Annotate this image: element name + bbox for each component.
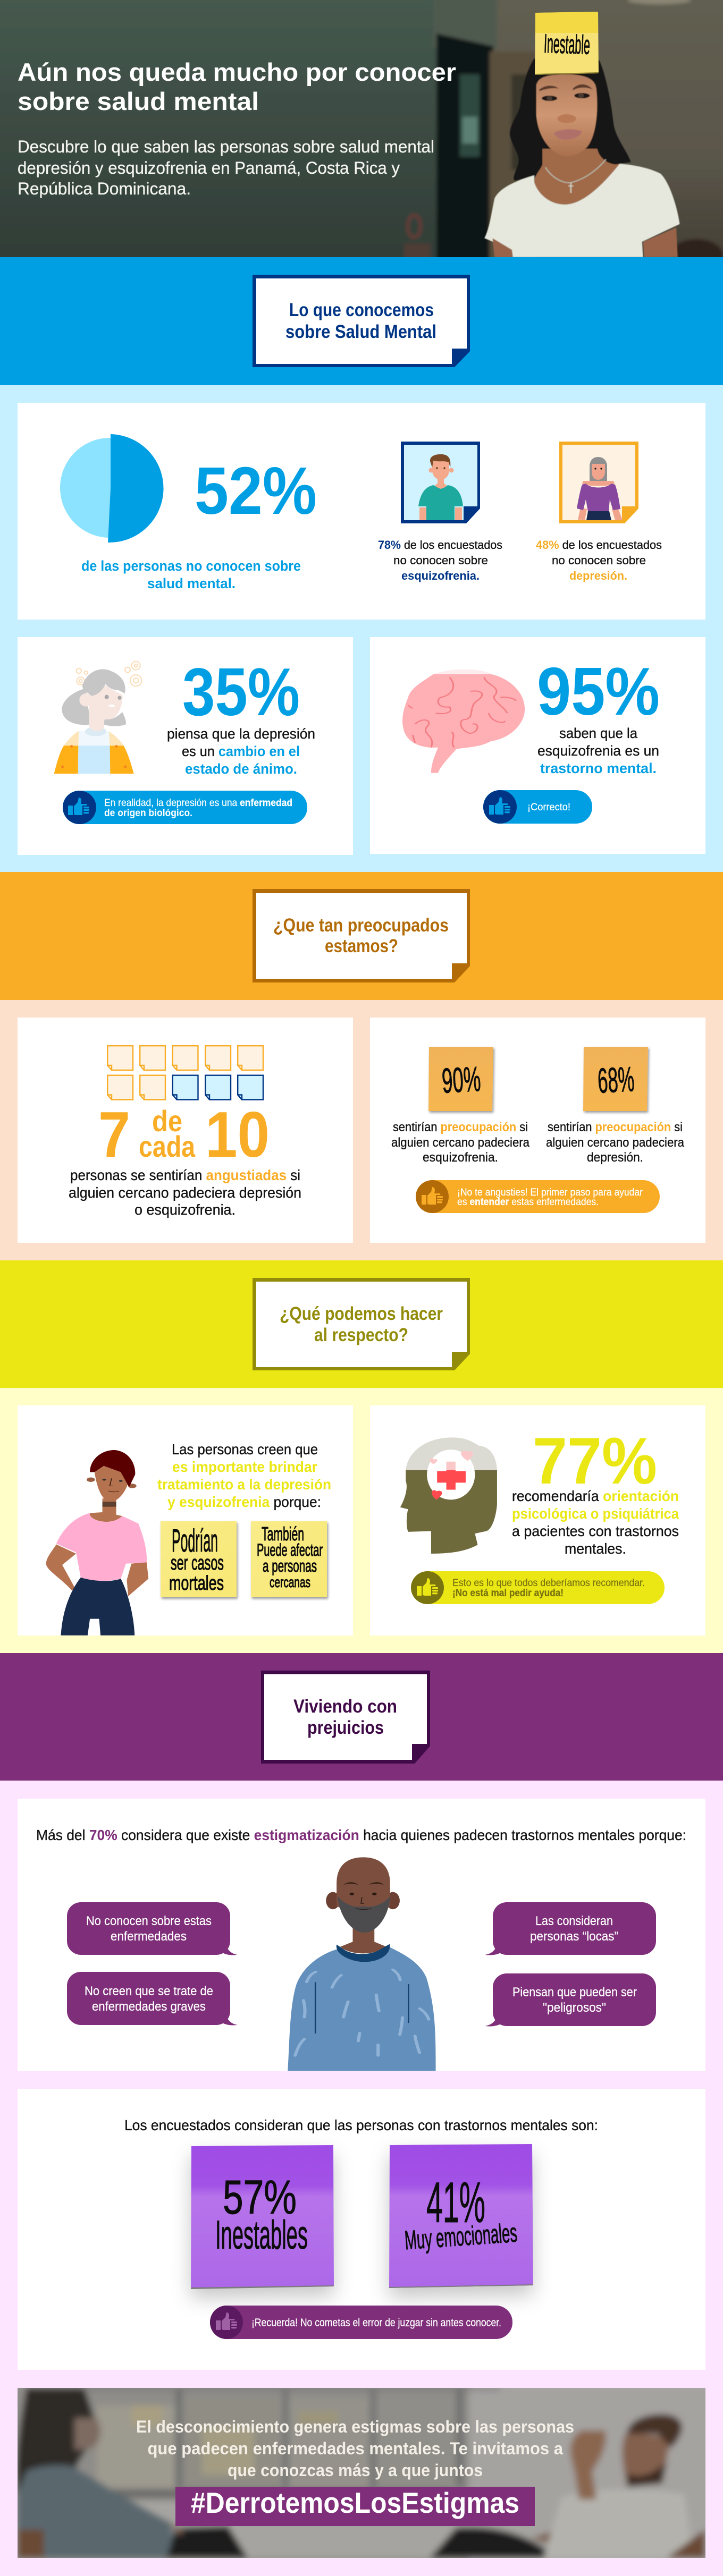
- statement: psicológica o psiquiátrica: [512, 1505, 679, 1522]
- sticky note: podrian ser casos mortales: ser casos: [171, 1552, 224, 1574]
- caption 48%: [536, 538, 662, 582]
- statement: es importante brindar: [172, 1459, 317, 1475]
- sticky note: inestable: Inestable: [543, 29, 591, 60]
- sticky note: podrian ser casos mortales: mortales: [169, 1572, 224, 1595]
- statement: esquizofrenia es un: [537, 743, 659, 759]
- note grid icons: [107, 1046, 263, 1100]
- caption 78%: 78% de los encuestados: [378, 538, 502, 552]
- section 3 title card: [253, 1278, 470, 1370]
- illustration: bearded man: [288, 1857, 436, 2071]
- statement: Más del 70% considera que existe estigmatización hacia quienes padecen trastornos mentales porque:: [36, 1827, 686, 1843]
- pill note: ¡No está mal pedir ayuda!: [452, 1587, 564, 1599]
- sticky note: 41% muy emocionales: [389, 2144, 533, 2288]
- statement: recomendaría orientación: [512, 1488, 679, 1504]
- stat 7 de cada 10: cada: [139, 1130, 196, 1163]
- bubble: no creen: No creen que se trate de: [85, 1984, 213, 1998]
- subheading: depresión y esquizofrenia en Panamá, Costa Rica y: [18, 158, 400, 177]
- caption 68%: sentirían preocupación si: [548, 1120, 683, 1134]
- section 3 header band: [0, 1260, 723, 1388]
- subheading: República Dominicana.: [18, 179, 191, 198]
- statement: [69, 1167, 301, 1218]
- caption 90%: alguien cercano padeciera: [391, 1136, 529, 1150]
- heading: Aún nos queda mucho por conocer: [18, 58, 456, 86]
- section 2 header band: [0, 872, 723, 1000]
- pill note: [483, 790, 592, 824]
- bubble: peligrosos: "peligrosos": [543, 2001, 606, 2015]
- closing message: El desconocimiento genera estigmas sobre las personas: [136, 2417, 574, 2436]
- panel: encuestados: [18, 2089, 705, 2370]
- statement: estado de ánimo.: [185, 761, 297, 777]
- panel: tratamiento: [18, 1405, 353, 1636]
- bubble: peligrosos: [485, 1973, 656, 2027]
- panel: 77 percent: [370, 1405, 705, 1636]
- section 2 title card: [253, 889, 470, 982]
- pie chart: [60, 434, 164, 543]
- caption 48%: 48% de los encuestados: [536, 538, 662, 552]
- bubble: no conocen: No conocen sobre estas: [86, 1914, 212, 1928]
- pill note: ¡Recuerda! No cometas el error de juzgar sin antes conocer.: [251, 2317, 501, 2329]
- caption: [81, 558, 301, 591]
- heading: [18, 58, 456, 115]
- hashtag box: #DerrotemosLosEstigmas: [191, 2486, 519, 2519]
- caption 68%: [546, 1120, 684, 1165]
- bubble: locas: [485, 1902, 656, 1955]
- sticky note: 41% muy emocionales: 41%: [426, 2170, 485, 2234]
- statement: tratamiento a la depresión: [157, 1476, 331, 1493]
- sticky note: podrian ser casos mortales: [161, 1521, 237, 1597]
- panel: 7 de cada 10: [18, 1018, 353, 1243]
- caption 68%: depresión.: [587, 1150, 643, 1165]
- caption 90%: [391, 1120, 529, 1165]
- statement: [157, 1441, 331, 1510]
- sticky note: tambien puede afectar: a personas: [263, 1556, 317, 1575]
- section 2 body: [0, 1000, 723, 1260]
- illustration: worried woman: [54, 662, 141, 774]
- sticky note: tambien puede afectar: cercanas: [270, 1574, 310, 1590]
- statement: personas se sentirían angustiadas si: [70, 1167, 300, 1183]
- sticky note: podrian ser casos mortales: Podrían: [172, 1523, 218, 1558]
- blurred photo: therapy session: [4, 2383, 719, 2563]
- panel: estigmatizacion: [18, 1799, 705, 2071]
- caption 78%: esquizofrenia.: [401, 569, 480, 582]
- statement: piensa que la depresión: [167, 726, 315, 742]
- illustration: brain: [402, 670, 525, 773]
- stat 7 de cada 10: 7: [98, 1098, 130, 1171]
- statement: y esquizofrenia porque:: [167, 1494, 321, 1510]
- statement: es un cambio en el: [182, 743, 300, 759]
- sticky note 68%: [583, 1047, 648, 1111]
- stat 7 de cada 10: de: [152, 1104, 182, 1138]
- section 1 title card: [253, 275, 470, 367]
- stat 35%: 35%: [182, 654, 300, 730]
- pill note: [411, 1571, 665, 1604]
- panel: 52 percent: [18, 403, 705, 620]
- bubble: no conocen: [67, 1902, 238, 1955]
- bubble: no creen: [67, 1972, 238, 2026]
- statement: [512, 1488, 679, 1557]
- illustration: woman in pink: [46, 1450, 148, 1636]
- statement: mentales.: [565, 1540, 626, 1557]
- section 1 title card: Lo que conocemos: [289, 300, 434, 320]
- sticky note 68%: 68%: [596, 1059, 635, 1100]
- bubble: locas: personas “locas”: [530, 1929, 618, 1944]
- closing message: [136, 2417, 574, 2480]
- caption 90%: esquizofrenia.: [423, 1150, 498, 1165]
- stat 77%: 77%: [533, 1425, 657, 1498]
- section 4 body: [0, 1781, 723, 2576]
- section 1 body: [0, 385, 723, 872]
- section 4 header band: [0, 1653, 723, 1781]
- hero: photo banner: [0, 0, 723, 271]
- statement: trastorno mental.: [540, 760, 657, 776]
- pill note: ¡No te angusties! El primer paso para ayudar: [457, 1187, 643, 1198]
- stat 7 de cada 10: 10: [205, 1098, 270, 1171]
- statement: Las personas creen que: [172, 1441, 318, 1458]
- section 3 title card: al respecto?: [314, 1325, 408, 1345]
- section 4 title card: [261, 1671, 430, 1764]
- statement: Los encuestados consideran que las personas con trastornos mentales son:: [124, 2117, 598, 2133]
- pill note: [416, 1180, 660, 1213]
- pill note: Esto es lo que todos deberíamos recomendar.: [452, 1577, 645, 1589]
- pill note: En realidad, la depresión es una enfermedad: [104, 797, 292, 809]
- closing message: que padecen enfermedades mentales. Te invitamos a: [148, 2439, 563, 2458]
- subheading: [18, 137, 434, 198]
- stat 95%: 95%: [537, 654, 660, 729]
- stat 52%: 52%: [195, 453, 317, 528]
- caption: de las personas no conocen sobre: [81, 558, 301, 574]
- statement: alguien cercano padeciera depresión: [69, 1184, 301, 1201]
- note: man: [401, 442, 480, 523]
- heading: sobre salud mental: [18, 87, 259, 115]
- section 4 title card: prejuicios: [307, 1717, 384, 1738]
- pill note: [63, 791, 307, 824]
- subheading: Descubre lo que saben las personas sobre salud mental: [18, 137, 434, 156]
- stat 7 de cada 10: [98, 1098, 270, 1171]
- note: woman: [559, 442, 638, 523]
- section 3 body: [0, 1388, 723, 1653]
- section 3 title card: ¿Qué podemos hacer: [280, 1303, 443, 1324]
- sticky note: tambien puede afectar: Puede afectar: [257, 1540, 323, 1560]
- pill note: de origen biológico.: [104, 807, 192, 819]
- sticky note: 57% inestables: Inestables: [215, 2213, 308, 2258]
- sticky note: 41% muy emocionales: Muy emocionales: [403, 2218, 518, 2255]
- hero photo: [0, 0, 723, 271]
- section 1 header band: [0, 257, 723, 385]
- caption 68%: alguien cercano padeciera: [546, 1136, 684, 1150]
- statement: [167, 726, 315, 777]
- sticky note: tambien puede afectar: [251, 1521, 327, 1597]
- panel: 95 percent: [370, 637, 705, 854]
- section 4 title card: Viviendo con: [293, 1696, 397, 1717]
- caption 48%: depresión.: [569, 569, 627, 582]
- section 2 title card: estamos?: [325, 936, 398, 956]
- pill note: [210, 2306, 512, 2339]
- caption 90%: sentirían preocupación si: [393, 1120, 528, 1134]
- statement: a pacientes con trastornos: [512, 1523, 679, 1539]
- sticky note: inestable: [535, 12, 599, 75]
- caption 48%: no conocen sobre: [552, 554, 646, 567]
- panel: 35 percent: [18, 637, 353, 855]
- closing banner: [4, 2383, 719, 2563]
- pill note: ¡Correcto!: [527, 801, 570, 813]
- caption 78%: no conocen sobre: [393, 554, 488, 567]
- statement: [537, 725, 659, 776]
- statement: o esquizofrenia.: [134, 1201, 236, 1218]
- sticky note: tambien puede afectar: También: [262, 1523, 304, 1545]
- section 1 title card: sobre Salud Mental: [285, 321, 436, 342]
- bubble: locas: Las consideran: [535, 1914, 613, 1928]
- sticky note 90%: 90%: [441, 1059, 482, 1100]
- sticky note: 57% inestables: 57%: [223, 2171, 297, 2224]
- sticky note: 57% inestables: [191, 2145, 334, 2289]
- bubble: peligrosos: Piensan que pueden ser: [512, 1985, 637, 1999]
- panel: preocupacion: [370, 1018, 705, 1243]
- sticky note 90%: [428, 1047, 493, 1111]
- caption: salud mental.: [147, 575, 236, 591]
- section 2 title card: ¿Que tan preocupados: [273, 915, 449, 936]
- closing message: que conozcas más y a que juntos: [228, 2461, 483, 2480]
- illustration: head with cross: [400, 1437, 497, 1554]
- bubble: no creen: enfermedades graves: [92, 1999, 206, 2014]
- statement: saben que la: [559, 725, 638, 741]
- caption 78%: [378, 538, 502, 582]
- bubble: no conocen: enfermedades: [111, 1929, 187, 1944]
- pill note: es entender estas enfermedades.: [457, 1196, 599, 1208]
